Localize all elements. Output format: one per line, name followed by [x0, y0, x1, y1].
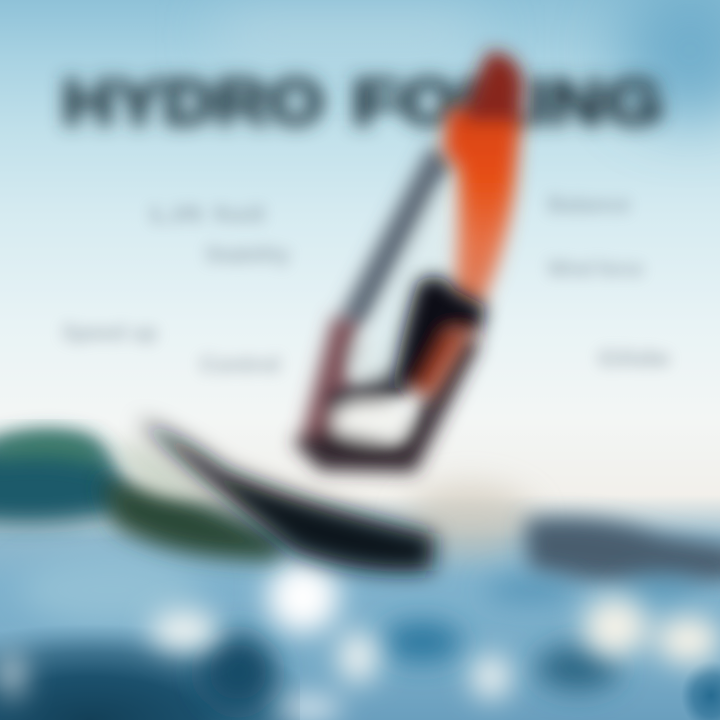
- wave crest left: [0, 434, 285, 560]
- label: right: Wind force: [548, 256, 643, 281]
- warm haze at horizon: [405, 485, 535, 555]
- boom frame: [292, 335, 480, 472]
- dark red sail tip: [462, 52, 524, 122]
- label: upper right: Balance: [548, 192, 630, 217]
- light water patch: [20, 555, 200, 625]
- mast upper: [340, 146, 454, 326]
- sail window: [360, 190, 465, 385]
- boom window: [334, 402, 406, 438]
- label: upper left second: Stability: [205, 242, 291, 267]
- corner sky tint: [220, 0, 720, 120]
- title: FOILING: [352, 66, 664, 138]
- mast lower: [298, 316, 360, 450]
- annotation labels: [62, 192, 670, 377]
- dark water swells: [0, 600, 300, 720]
- label: centre left: Control: [200, 352, 280, 377]
- sea: [0, 485, 720, 720]
- title: HYDRO: [62, 66, 324, 138]
- orange sail: [443, 52, 524, 305]
- far shoreline: [525, 518, 720, 582]
- board: [138, 420, 435, 572]
- label: lower right: Glide: [598, 346, 670, 371]
- white foam: [0, 561, 720, 720]
- rider: [392, 277, 486, 398]
- title: [62, 66, 664, 138]
- label: middle left: Speed up: [62, 320, 157, 345]
- mast and boom: [292, 146, 480, 472]
- label: upper left: Lift foil: [150, 202, 265, 227]
